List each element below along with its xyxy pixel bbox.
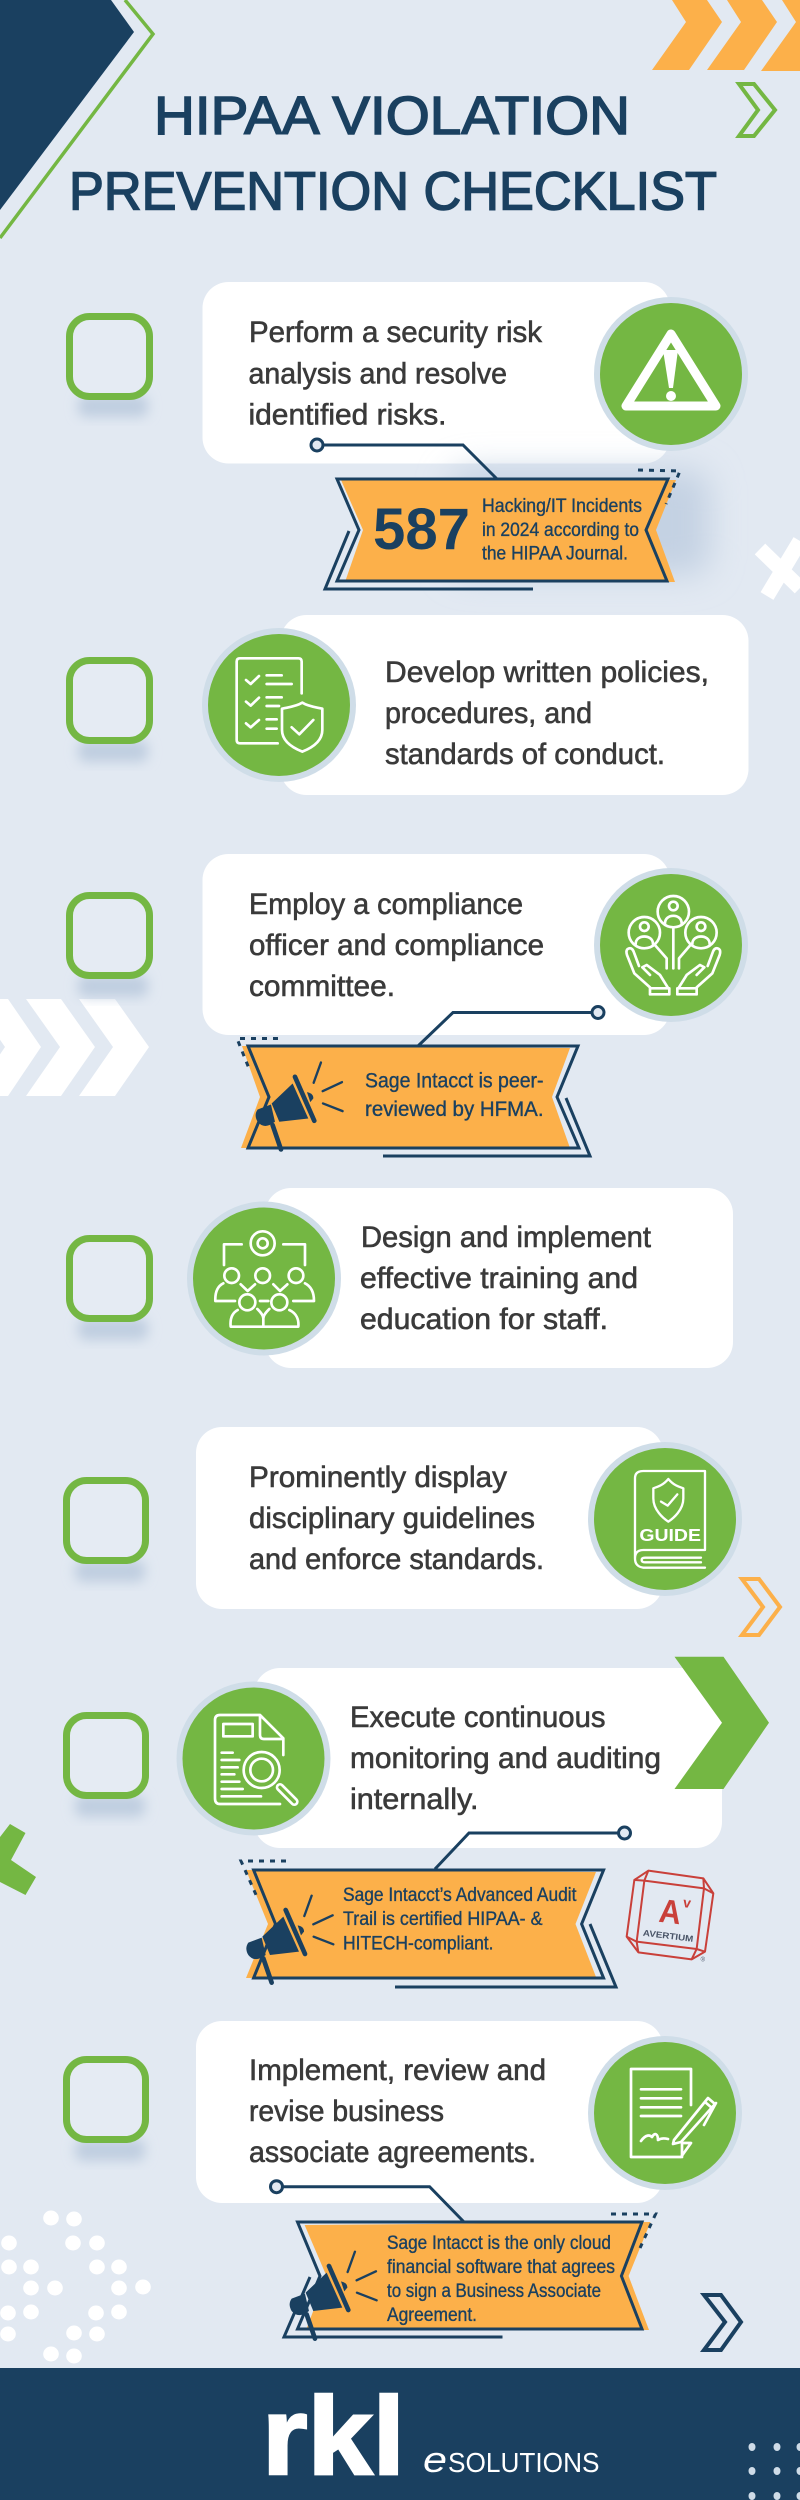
text 6: monitoring and auditing	[350, 1742, 661, 1775]
text 7: associate agreements.	[249, 2136, 536, 2169]
text 3	[249, 888, 544, 1003]
checkbox 2	[70, 660, 150, 762]
text 3: officer and compliance	[249, 929, 544, 962]
connector 6	[435, 1827, 630, 1869]
checklist item 1	[70, 282, 748, 589]
decor: green outlined chevron	[739, 84, 775, 136]
text 1: Perform a security risk	[249, 316, 543, 349]
checklist item 6	[66, 1657, 769, 1987]
checkbox 1	[70, 316, 150, 417]
callout text: Agreement.	[387, 2304, 477, 2326]
text 6: Execute continuous	[350, 1701, 606, 1734]
decor: navy outlined chevron	[704, 2295, 741, 2350]
logo: Avertium	[627, 1871, 713, 1964]
text 4	[360, 1221, 652, 1336]
callout text: Sage Intacct is the only cloud	[387, 2232, 611, 2254]
connector 1	[311, 439, 497, 479]
text 5: and enforce standards.	[249, 1543, 544, 1576]
text 2: Develop written policies,	[385, 656, 709, 689]
text 6: internally.	[350, 1783, 478, 1816]
logo: rkl eSOLUTIONS	[262, 2375, 600, 2498]
text 5: disciplinary guidelines	[249, 1502, 535, 1535]
decor: navy corner arrow	[0, 0, 153, 238]
text 7: Implement, review and	[249, 2054, 546, 2087]
callout text: reviewed by HFMA.	[365, 1098, 544, 1121]
icon: megaphone	[290, 2252, 377, 2339]
logo: Avertium: AVERTIUM	[642, 1928, 694, 1944]
card 2	[280, 615, 748, 795]
logo: Avertium: A	[657, 1893, 683, 1932]
text 4: Design and implement	[361, 1221, 652, 1254]
text 6	[350, 1701, 661, 1816]
checklist item 7	[66, 2021, 742, 2339]
text 7	[249, 2054, 546, 2169]
callout ribbon: HFMA	[237, 1038, 590, 1156]
text 3: Employ a compliance	[249, 888, 523, 921]
title	[69, 86, 717, 222]
title: HIPAA VIOLATION	[154, 86, 630, 146]
callout text	[365, 1070, 544, 1121]
callout text: financial software that agrees	[387, 2256, 615, 2278]
icon badge: people in hands	[594, 868, 748, 1022]
callout text: to sign a Business Associate	[387, 2280, 601, 2302]
footer band	[0, 2368, 800, 2500]
icon badge: document audit	[176, 1682, 330, 1836]
logo: Avertium: ®	[701, 1957, 706, 1964]
stat caption: the HIPAA Journal.	[482, 542, 628, 564]
checklist item 5	[66, 1427, 742, 1609]
stat caption: Hacking/IT Incidents	[482, 495, 642, 517]
checkbox 6	[66, 1716, 146, 1817]
checklist item 3	[70, 854, 748, 1156]
logo: rkl eSOLUTIONS: e	[423, 2439, 447, 2480]
text 2: procedures, and	[385, 697, 592, 730]
text 1: identified risks.	[248, 398, 446, 432]
decor: white X	[760, 541, 800, 596]
icon badge: signed agreement	[588, 2036, 742, 2190]
callout text: Trail is certified HIPAA- &	[343, 1908, 542, 1930]
checklist item 2	[70, 615, 748, 795]
stat caption	[482, 495, 642, 564]
card 4	[265, 1188, 733, 1368]
text 2	[385, 656, 709, 771]
checkbox 5	[66, 1480, 146, 1582]
logo: rkl eSOLUTIONS: rkl	[262, 2375, 405, 2498]
icon: megaphone	[246, 1896, 333, 1983]
footer dots	[748, 2443, 800, 2500]
decor: green chevron left edge	[0, 1824, 36, 1895]
stat number: 587	[373, 497, 470, 562]
text 1: analysis and resolve	[248, 358, 507, 390]
stat ribbon: 587	[325, 470, 680, 589]
title: PREVENTION CHECKLIST	[69, 162, 717, 222]
decor: white chevrons left	[0, 999, 149, 1096]
icon badge: policy checklist	[202, 628, 356, 782]
connector 3	[418, 1006, 604, 1046]
text 4: education for staff.	[360, 1303, 608, 1336]
decor: orange chevrons top right	[652, 0, 800, 71]
callout text	[343, 1884, 577, 1954]
text 3: committee.	[249, 970, 395, 1003]
text 5	[249, 1461, 544, 1576]
callout text: Sage Intacct’s Advanced Audit	[343, 1884, 577, 1906]
card 6	[254, 1668, 722, 1848]
green chevron over card 6	[674, 1657, 769, 1789]
text 2: standards of conduct.	[385, 738, 665, 771]
text 4: effective training and	[360, 1262, 638, 1295]
decor: orange outlined chevron	[742, 1579, 780, 1635]
card 1	[202, 282, 670, 464]
logo: Avertium: v	[682, 1894, 692, 1911]
card 3	[202, 854, 670, 1035]
text 1	[248, 316, 543, 432]
stat caption: in 2024 according to	[482, 519, 639, 541]
callout ribbon: Business Associate Agreement	[284, 2214, 656, 2339]
callout text: Sage Intacct is peer-	[365, 1070, 544, 1092]
decor: white dot cluster	[0, 2210, 151, 2364]
card 7	[196, 2021, 663, 2203]
callout ribbon: Advanced Audit Trail	[241, 1861, 616, 1987]
callout text	[387, 2232, 615, 2326]
text 7: revise business	[249, 2095, 444, 2128]
checklist item 4	[70, 1188, 733, 1368]
ribbon shadow	[450, 470, 710, 575]
connector 7	[270, 2181, 464, 2222]
icon badge: warning triangle	[594, 297, 748, 451]
card 5	[196, 1427, 663, 1609]
book label: GUIDE	[639, 1525, 701, 1545]
checkbox 3	[70, 896, 150, 997]
icon badge: training group	[187, 1202, 341, 1356]
callout text: HITECH-compliant.	[343, 1932, 494, 1954]
logo: rkl eSOLUTIONS: SOLUTIONS	[448, 2447, 600, 2478]
checkbox 7	[66, 2060, 146, 2161]
icon: megaphone	[256, 1062, 343, 1149]
text 5: Prominently display	[249, 1461, 507, 1494]
checkbox 4	[70, 1238, 150, 1340]
icon badge: guide book	[588, 1442, 742, 1596]
